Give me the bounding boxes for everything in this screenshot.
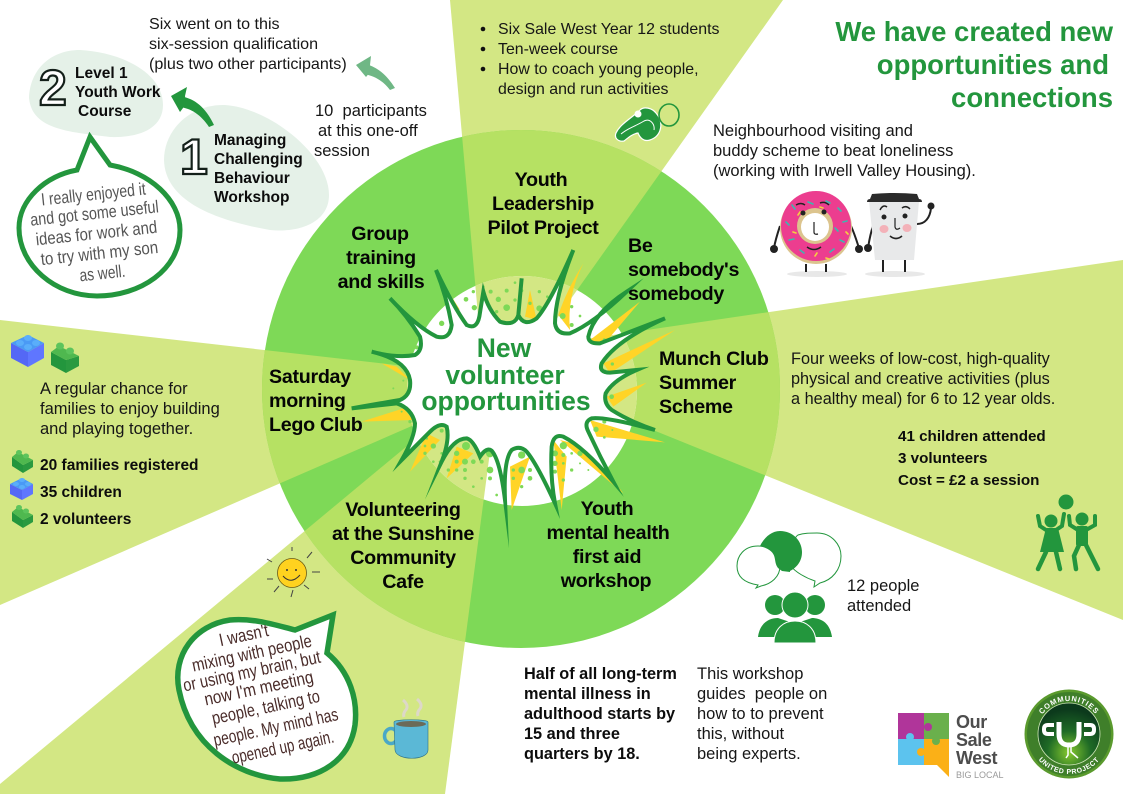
section label: Youth Leadership: Pilot Project [488,217,599,239]
section label: Youth mental health: mental health [546,522,670,544]
icon: blue lego brick [11,335,44,367]
speech bubble: mind opened up: or using my brain, but [181,647,322,695]
section label: Sunshine Cafe: Cafe [382,571,424,593]
section label: Youth Leadership: Leadership [492,193,594,215]
section label: Sunshine Cafe: Volunteering [345,499,461,521]
icon: speech bubbles and people [737,531,841,643]
speech bubble: enjoyed it: ideas for work and [35,217,158,249]
blob: Level 1 Youth Work Course: Level 1 [75,65,128,82]
text: four weeks: a healthy meal) for 6 to 12 year olds. [791,390,1055,408]
text: neighbourhood visiting: (working with Irwell Valley Housing). [713,162,976,180]
main title: opportunities and [877,49,1109,80]
blob: Managing Challenging Behaviour Workshop [164,105,329,230]
text: half of all mental illness: 15 and three [524,725,620,743]
logo: Our Sale West Big Local: West [956,748,997,768]
text: half of all mental illness: Half of all long-term [524,665,677,683]
starburst title: opportunities [421,386,591,416]
section label: Sunshine Cafe: Community [350,547,456,569]
blob: Managing Challenging Behaviour Workshop: Behaviour [214,170,290,187]
stat: volunteers: 2 volunteers [40,511,131,528]
speech bubble: enjoyed it [19,137,180,296]
logo: Our Sale West Big Local [898,712,1004,780]
text: 10 participants: session [314,142,370,160]
starburst title: volunteer [445,360,565,390]
speech bubble: mind opened up [178,615,356,779]
blob: Level 1 Youth Work Course: Youth Work [75,84,161,101]
starburst title [421,333,591,416]
logo: Our Sale West Big Local: Our [956,712,987,732]
blob: Managing Challenging Behaviour Workshop: Managing [214,132,286,149]
stat: children: 35 children [40,484,122,501]
text: neighbourhood visiting: buddy scheme to beat loneliness [713,142,953,160]
stats: munch club: 3 volunteers [898,450,987,467]
stats: munch club: 41 children attended [898,428,1046,445]
text: regular chance: and playing together. [40,420,193,438]
speech bubble: enjoyed it: to try with my son [40,237,159,269]
main title: We have created new [835,16,1114,47]
blob: Managing Challenging Behaviour Workshop: Challenging [214,151,303,168]
bullet list: youth leadership: design and run activities [498,81,669,98]
starburst title: New [477,333,532,363]
central green circle [262,130,780,648]
text: this workshop guides: this, without [697,725,785,743]
section label: Youth mental health: first aid [573,546,641,568]
bullet list: youth leadership: Ten-week course [498,41,618,58]
icon: donut and coffee characters [770,191,934,277]
stat: families registered [12,450,199,474]
icon: sun [267,547,320,597]
arrow: session to qualification [356,56,395,90]
text: this workshop guides: being experts. [697,745,801,763]
text: regular chance: A regular chance for [40,380,188,398]
icon: green lego brick [51,342,79,373]
speech bubble: enjoyed it: and got some useful [29,196,160,230]
section label: Lego Club: morning [269,390,346,412]
speech bubble: enjoyed it: I really enjoyed it [40,179,147,209]
bullet list: youth leadership: Six Sale West Year 12 students [498,21,719,38]
section label: Youth mental health: workshop [560,570,652,592]
starburst with yellow spikes and halftone dots [352,250,675,510]
section label: Be somebody's somebody: Be [628,235,653,257]
stat: volunteers [12,505,131,528]
icon: mug [384,699,428,758]
icon: whistle [615,104,679,141]
text: six went on: six-session qualification [149,35,318,53]
stats: munch club: Cost = £2 a session [898,472,1039,489]
icon: numeral 1: 1 [180,129,208,185]
icon: children playing with ball [1038,494,1098,569]
section label: Lego Club: Lego Club [269,414,363,436]
text: this workshop guides: guides people on [697,685,827,703]
section label: Group training: training [346,247,416,269]
speech bubble: enjoyed it: as well. [78,261,126,285]
text: neighbourhood visiting: Neighbourhood visiting and [713,122,913,140]
speech bubble: mind opened up: people. My mind has [212,704,340,750]
text: this workshop guides: This workshop [697,665,803,683]
section label: Youth mental health: Youth [581,498,633,520]
text: 10 participants: 10 participants [315,102,427,120]
speech bubble: mind opened up: mixing with people [190,631,313,676]
section label: Munch Club: Munch Club [659,348,769,370]
main title [835,16,1114,113]
text: half of all mental illness: mental illness in [524,685,651,703]
section label: Munch Club: Summer [659,372,737,394]
speech bubble: mind opened up: I wasn't [217,620,270,650]
text: half of all mental illness: quarters by 18. [524,745,640,763]
section label: Be somebody's somebody: somebody [628,283,724,305]
arrow: workshop to course [171,87,214,127]
stat: families registered: 20 families registered [40,457,199,474]
text: 12 people attended: 12 people [847,577,920,595]
logo: Communities United Project [1024,690,1114,778]
text: 10 participants: at this one-off [318,122,418,140]
speech bubble: mind opened up: now I'm meeting [202,667,315,709]
blob: Managing Challenging Behaviour Workshop: Workshop [214,189,290,206]
text: four weeks: Four weeks of low-cost, high-quality [791,350,1051,368]
main title: connections [951,82,1113,113]
speech bubble: mind opened up: opened up again. [230,727,336,768]
stat: children [10,478,122,501]
logo: Communities United Project: UNITED PROJECT [1039,756,1098,774]
text: four weeks: physical and creative activities (plus [791,370,1050,388]
icon: numeral 2: 2 [39,60,67,116]
blob: Level 1 Youth Work Course [29,50,163,137]
text: this workshop guides: how to to prevent [697,705,824,723]
section label: Munch Club: Scheme [659,396,733,418]
text: 12 people attended: attended [847,597,911,615]
text: regular chance: families to enjoy building [40,400,220,418]
blob: Level 1 Youth Work Course: Course [78,103,132,120]
section label: Youth Leadership: Youth [515,169,567,191]
logo: Our Sale West Big Local: BIG LOCAL [956,770,1004,780]
text: half of all mental illness: adulthood starts by [524,705,675,723]
logo: Our Sale West Big Local: Sale [956,730,992,750]
section label: Lego Club: Saturday [269,366,351,388]
section label: Sunshine Cafe: at the Sunshine [332,523,474,545]
section label: Group training: and skills [338,271,425,293]
text: six went on: (plus two other participants) [149,55,347,73]
bullet list: youth leadership: How to coach young people, [498,61,699,78]
bullet list: youth leadership [481,21,719,98]
logo: Communities United Project: COMMUNITIES [1039,696,1098,714]
section label: Be somebody's somebody: somebody's [628,259,739,281]
section label: Group training: Group [351,223,409,245]
speech bubble: mind opened up: people, talking to [210,686,322,728]
text: six went on: Six went on to this [149,15,280,33]
